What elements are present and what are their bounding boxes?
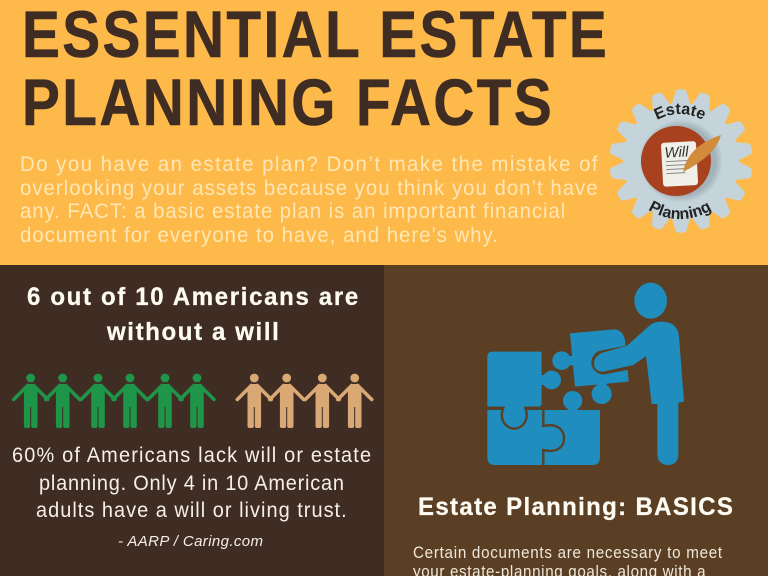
statistic text: planning. Only 4 in 10 American (39, 472, 344, 495)
intro text: document for everyone to have, and here’s why. (20, 224, 498, 247)
icon: estate planning gear badge: Estate (654, 104, 705, 120)
intro text (20, 153, 598, 247)
intro text: Do you have an estate plan? Don’t make the mistake of (20, 153, 598, 176)
title: PLANNING FACTS (22, 66, 552, 140)
header background (0, 0, 768, 265)
intro text: any. FACT: a basic estate plan is an important financial (20, 200, 565, 223)
panel: left statistics (0, 265, 384, 576)
icon: estate planning gear badge: Planning (648, 200, 712, 220)
heading: estate planning basics: Estate Planning: BASICS (418, 494, 733, 521)
statistic text: 60% of Americans lack will or estate (12, 444, 371, 467)
heading: 6 out of 10: 6 out of 10 Americans are (27, 284, 358, 311)
basics text: Certain documents are necessary to meet (413, 544, 723, 562)
title: ESSENTIAL ESTATE (22, 0, 607, 72)
heading: 6 out of 10 (27, 284, 358, 346)
title (22, 0, 607, 140)
statistic text: adults have a will or living trust. (36, 499, 347, 522)
icon: estate planning gear badge: Will (664, 143, 690, 162)
icon: estate planning gear badge (610, 89, 752, 233)
panel: right basics (384, 265, 768, 576)
heading: 6 out of 10: without a will (106, 319, 279, 346)
icon: four tan people (237, 374, 372, 428)
intro text: overlooking your assets because you think you don’t have (20, 177, 598, 200)
icon: person assembling puzzle (486, 283, 684, 467)
basics text (413, 544, 723, 576)
source citation: - AARP / Caring.com (118, 533, 263, 550)
statistic text (12, 444, 371, 522)
icon: six green people (14, 374, 214, 428)
